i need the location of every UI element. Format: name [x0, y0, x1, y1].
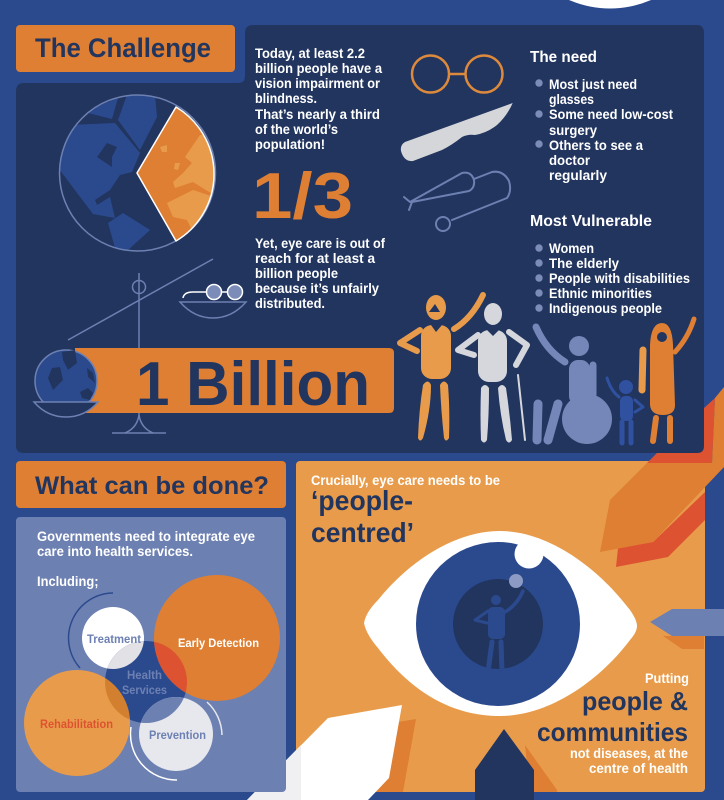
text: vision impairment statistics: population!	[255, 137, 325, 152]
text: people-centred: ‘people-	[311, 485, 413, 516]
figure: wheelchair user	[536, 327, 612, 444]
figure: child	[607, 378, 643, 443]
text: most vulnerable: The elderly	[549, 256, 619, 271]
text: most vulnerable: Ethnic minorities	[549, 286, 652, 301]
text: eye care out of reach: billion people	[255, 266, 338, 281]
text: people and communities: not diseases, at the	[570, 746, 688, 761]
text: eye care out of reach: because it’s unfairly	[255, 281, 379, 296]
text: the need: regularly	[549, 168, 607, 183]
text: vision impairment statistics: vision impairment or	[255, 76, 381, 91]
icon: stethoscope	[404, 172, 510, 231]
text: the need	[530, 49, 673, 183]
icon: orange glasses	[412, 56, 502, 92]
big number: 1/3: 1/3	[252, 159, 353, 232]
text: vision impairment statistics: blindness.	[255, 91, 317, 106]
text: most vulnerable: Women	[549, 241, 594, 256]
figure: man with turban	[400, 295, 483, 440]
text: people and communities: centre of health	[589, 761, 688, 776]
text: governments intro: Governments need to integrate eye	[37, 529, 255, 544]
venn diagram: health services: Treatment	[87, 632, 141, 646]
decorative white disc at top	[507, 0, 713, 8]
text: people and communities: communities	[537, 717, 688, 747]
text: eye care out of reach: distributed.	[255, 296, 325, 311]
text: eye care out of reach: reach for at least a	[255, 251, 375, 266]
venn diagram: health services: Rehabilitation	[40, 717, 113, 731]
text: the need: Most just need	[549, 77, 637, 92]
eye illustration	[364, 531, 637, 716]
banner: 1 Billion: 1 Billion	[136, 350, 370, 419]
venn diagram: health services: Services	[122, 683, 167, 697]
text: the need: doctor	[549, 153, 591, 168]
panel: what can be done	[16, 517, 286, 792]
small globe on scale pan	[34, 350, 98, 417]
text: people-centred: Crucially, eye care needs to be	[311, 473, 500, 488]
text: vision impairment statistics	[255, 46, 382, 152]
text: eye care out of reach	[255, 236, 385, 311]
text: vision impairment statistics: of the world’s	[255, 122, 338, 137]
venn diagram: health services: Health	[127, 668, 162, 682]
venn diagram: health services: Early Detection	[178, 636, 259, 650]
text: vision impairment statistics: Today, at least 2.2	[255, 46, 365, 61]
figure: person with white cane	[458, 303, 527, 442]
figure: woman in robe	[642, 319, 694, 441]
arrow: orange and red top right	[600, 387, 724, 567]
venn diagram: health services	[24, 575, 280, 780]
heading tag: The Challenge	[16, 25, 235, 72]
right panel: people-centred background	[296, 461, 705, 792]
heading tag: What can be done?: What can be done?	[35, 472, 269, 500]
panel: the challenge	[16, 25, 704, 453]
text: people and communities	[537, 671, 689, 776]
arrow: blue pointing to eye from right	[650, 609, 724, 649]
figure in pupil	[475, 591, 523, 672]
text: governments intro: care into health services.	[37, 544, 193, 559]
text: people-centred	[311, 473, 500, 548]
text: most vulnerable: Indigenous people	[549, 301, 662, 316]
text: the need: Some need low-cost	[549, 107, 673, 122]
icon: scalpel	[401, 103, 513, 161]
text: vision impairment statistics: billion people have a	[255, 61, 382, 76]
scale illustration	[68, 259, 246, 433]
heading tag: The Challenge: The Challenge	[35, 33, 211, 63]
text: people and communities: people &	[582, 686, 688, 716]
text: vision impairment statistics: That’s nearly a third	[255, 107, 380, 122]
text: people-centred: centred’	[311, 517, 414, 548]
text: the need: The need	[530, 49, 597, 66]
text: eye care out of reach: Yet, eye care is out of	[255, 236, 385, 251]
text: governments intro: Including;	[37, 574, 98, 589]
text: most vulnerable: Most Vulnerable	[530, 213, 652, 230]
heading tag: What can be done?	[16, 461, 286, 508]
text: governments intro	[37, 529, 255, 589]
icon: glasses on scale	[183, 284, 242, 300]
text: the need: glasses	[549, 92, 594, 107]
text: the need: surgery	[549, 123, 597, 138]
text: most vulnerable: People with disabilities	[549, 271, 690, 286]
text: the need: Others to see a	[549, 138, 643, 153]
arrow: white bottom left	[247, 705, 416, 800]
arrow: dark pointing up with orange shadow	[475, 729, 557, 800]
globe with one third highlighted	[56, 95, 220, 255]
text: people and communities: Putting	[645, 671, 689, 686]
venn diagram: health services: Prevention	[149, 728, 206, 742]
text: most vulnerable	[530, 213, 690, 316]
